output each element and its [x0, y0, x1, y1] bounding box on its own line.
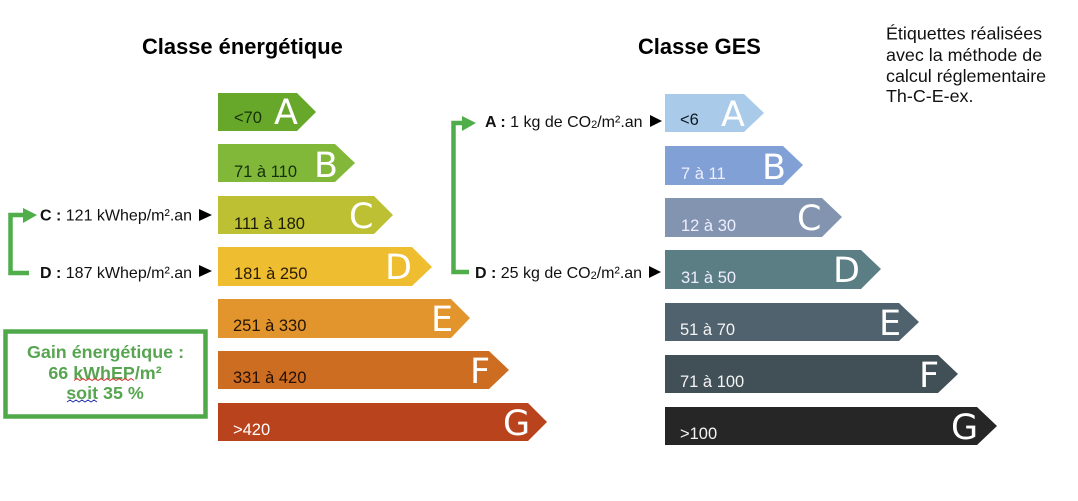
bar F energy: 331 à 420	[233, 369, 306, 387]
bar F energy: F	[470, 352, 490, 392]
label: A GES value	[485, 114, 662, 131]
bar B GES: B	[762, 148, 786, 188]
callout: gain énergétique	[6, 332, 206, 416]
bar A energy	[218, 93, 316, 133]
note: méthode de calcul	[886, 24, 1046, 106]
label: A GES value: 2	[591, 119, 597, 131]
bar D energy: D	[385, 248, 412, 288]
label: A GES value: /m².an	[597, 114, 643, 131]
bar B GES: 7 à 11	[681, 165, 726, 183]
bar A GES	[665, 94, 764, 135]
bar B energy: B	[314, 146, 338, 186]
bar F energy	[218, 351, 509, 392]
bar G energy	[218, 403, 547, 444]
bar C GES	[665, 198, 842, 239]
label: C energy value: C : 121 kWhep/m².an	[40, 208, 192, 224]
bar D energy	[218, 247, 432, 288]
bar B energy	[218, 144, 355, 186]
arrow: GES gain	[454, 116, 476, 272]
bar E GES	[665, 303, 919, 344]
bar E energy: E	[431, 300, 453, 340]
bar D GES	[665, 250, 881, 291]
bar F GES: 71 à 100	[680, 373, 744, 391]
bar B energy: 71 à 110	[234, 163, 297, 181]
bar C GES: 12 à 30	[681, 217, 736, 235]
bar C GES: C	[797, 199, 821, 239]
label: D GES value: 2	[591, 270, 597, 282]
callout: gain énergétique: 66 kWhEP/m²	[48, 363, 162, 383]
bar E energy: 251 à 330	[233, 317, 306, 335]
label: D GES value: D : 25 kg de CO	[475, 265, 591, 282]
label: D GES value: /m².an	[597, 265, 642, 282]
arrow: energy gain	[10, 208, 37, 273]
bar A energy: A	[274, 93, 298, 133]
bar D GES: 31 à 50	[681, 269, 736, 287]
bar C energy: C	[349, 197, 373, 237]
callout: gain énergétique: Gain énergétique :	[27, 342, 184, 362]
bar G GES: >100	[680, 425, 717, 443]
bar D GES: D	[833, 251, 860, 291]
bar F GES: F	[919, 356, 939, 396]
bar F GES	[665, 355, 958, 396]
bar A GES: A	[721, 95, 745, 135]
note: méthode de calcul: Th-C-E-ex.	[886, 86, 973, 106]
bar A energy: <70	[234, 109, 262, 127]
bar D energy: 181 à 250	[234, 265, 307, 283]
bar C energy: 111 à 180	[234, 215, 305, 233]
bar G GES	[665, 407, 997, 448]
note: méthode de calcul: avec la méthode de	[886, 45, 1042, 65]
bar E energy	[218, 299, 470, 340]
bar E GES: 51 à 70	[680, 321, 735, 339]
bar G energy: G	[503, 404, 530, 444]
chart: GES classes	[665, 94, 997, 448]
bar A GES: <6	[680, 111, 699, 129]
bar C energy	[218, 196, 393, 237]
bar E GES: E	[879, 304, 901, 344]
label: D GES value	[475, 265, 661, 282]
bar B GES	[665, 146, 803, 188]
title: Classe GES: Classe GES	[638, 34, 761, 59]
note: méthode de calcul: calcul réglementaire	[886, 66, 1046, 86]
note: méthode de calcul: Étiquettes réalisées	[886, 24, 1042, 44]
chart: energy classes	[218, 93, 547, 444]
callout: gain énergétique: soit 35 %	[66, 383, 144, 403]
label: A GES value: A : 1 kg de CO	[485, 114, 591, 131]
bar G energy: >420	[233, 421, 270, 439]
title: Classe énergétique: Classe énergétique	[142, 34, 343, 59]
label: D energy value: D : 187 kWhep/m².an	[40, 265, 192, 282]
bar G GES: G	[951, 408, 978, 448]
